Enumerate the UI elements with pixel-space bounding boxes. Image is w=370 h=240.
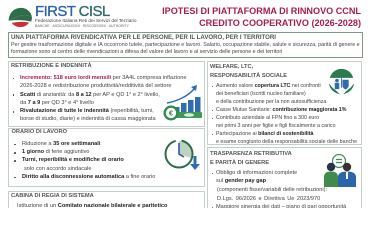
logo mark bbox=[8, 8, 32, 28]
trasparenza heading: TRASPARENZA RETRIBUTIVA bbox=[210, 151, 292, 157]
welfare list: e della contribuzione per la non autosufficienza bbox=[216, 98, 326, 104]
retribuzione list: Rivalutazione di tutte le indennità (reperibilità, turni, bbox=[20, 108, 154, 114]
icon: growth chart with euro: € bbox=[169, 109, 174, 118]
retribuzione list: 2026-2028 e redistribuzione produttività/redditività del settore bbox=[20, 83, 171, 89]
orario list: Diritto alla disconnessione automatica a fine orario bbox=[22, 174, 155, 180]
welfare list: Contributo aziendale al FPN fino a 300 euro bbox=[216, 114, 319, 120]
welfare heading bbox=[210, 64, 287, 79]
icon: two people with speech bubble bbox=[324, 154, 356, 187]
welfare heading: WELFARE, LTC, bbox=[210, 64, 253, 70]
icon: growth chart with euro bbox=[164, 85, 202, 120]
logo sub tagline: BANCHE · ASSICURAZIONI · RISCOSSIONI · AUTHORITY bbox=[35, 24, 129, 28]
welfare list: nei primi 3 anni per figlie e figli fiscalmente a carico bbox=[216, 122, 336, 128]
panel: trasparenza bbox=[207, 147, 362, 211]
orario heading: ORARIO DI LAVORO bbox=[12, 129, 67, 135]
intro text bbox=[11, 42, 360, 55]
welfare list: Partecipazione ai bilanci di sostenibilità bbox=[216, 130, 313, 136]
orario list: Turni, reperibilità e modifiche di orario bbox=[22, 157, 124, 163]
retribuzione list: Scatti di anzianità: da 8 a 12 per AP e QD 1° e 2° livello, bbox=[20, 92, 160, 98]
logo bbox=[8, 3, 137, 28]
trasparenza list: Obbligo di informazioni complete bbox=[216, 170, 297, 176]
welfare list bbox=[212, 82, 357, 144]
orario list: 1 giorno di ferie aggiuntivo bbox=[22, 149, 89, 155]
welfare list: e esame congiunto della responsabilità sociale delle banche bbox=[216, 138, 357, 144]
orario list: solo con accordo sindacale bbox=[24, 166, 91, 172]
icon: clock bbox=[164, 140, 200, 170]
panel: retribuzione bbox=[8, 61, 205, 127]
logo wordmark: FIRST CISL bbox=[35, 3, 110, 20]
retribuzione list: Incremento: 518 euro lordi mensili per 3A4L compresa inflazione bbox=[20, 74, 186, 80]
panel: welfare bbox=[207, 61, 362, 145]
retribuzione list bbox=[13, 74, 186, 122]
orario list bbox=[14, 140, 156, 180]
panel: cabina di regia bbox=[8, 191, 205, 211]
cabina heading: CABINA DI REGIA DI SISTEMA bbox=[11, 193, 94, 199]
panel: orario bbox=[8, 128, 205, 187]
intro heading: UNA PIATTAFORMA RIVENDICATIVA PER LE PERSONE, PER IL LAVORO, PER I TERRITORI bbox=[11, 34, 276, 40]
trasparenza list: D.Lgs. 96/2026 e Direttiva Ue 2023/970 bbox=[217, 196, 320, 202]
welfare list: Casse Mutue Sanitarie: contribuzione maggiorata 1% bbox=[216, 106, 346, 112]
welfare list: Aumento valore copertura LTC nei confronti bbox=[216, 82, 321, 88]
welfare list: dei beneficiari (iscritti nucleo familiare) bbox=[216, 90, 306, 96]
trasparenza heading: E PARITÀ DI GENERE bbox=[210, 160, 269, 166]
retribuzione list: da 7 a 9 per QD 3° e 4° livello bbox=[20, 100, 94, 106]
retribuzione list: borse di studio, diarie) e indennità di cassa maggiorata bbox=[20, 116, 156, 122]
trasparenza list: (componenti fisse/variabili delle retribuzioni): bbox=[217, 187, 327, 193]
intro text: formazione sono al centro delle rivendicazioni a difesa del valore del lavoro e al servizio delle persone e dei territori bbox=[11, 49, 282, 55]
retribuzione heading: RETRIBUZIONE E INDENNITÀ bbox=[11, 62, 92, 68]
orario list: Riduzione a 35 ore settimanali bbox=[22, 140, 100, 146]
icon: umbrella and family bbox=[328, 68, 354, 94]
panel: intro bbox=[8, 32, 363, 58]
welfare heading: RESPONSABILITÀ SOCIALE bbox=[210, 73, 287, 79]
logo tagline: Federazione Italiana Reti dei Servizi del Terziario bbox=[35, 18, 137, 23]
trasparenza heading bbox=[210, 151, 292, 166]
trasparenza list: sul gender pay gap bbox=[216, 178, 266, 184]
title bbox=[162, 6, 361, 28]
title: IPOTESI DI PIATTAFORMA DI RINNOVO CCNL bbox=[162, 6, 361, 16]
trasparenza list bbox=[212, 170, 346, 208]
title: CREDITO COOPERATIVO (2026-2028) bbox=[199, 18, 361, 28]
intro text: Per gestire trasformazione digitale e IA occorrono tutele, partecipazione e lavoro. Salario, occupazione stabile, salute e sicurezza, parità di genere e bbox=[11, 42, 360, 48]
